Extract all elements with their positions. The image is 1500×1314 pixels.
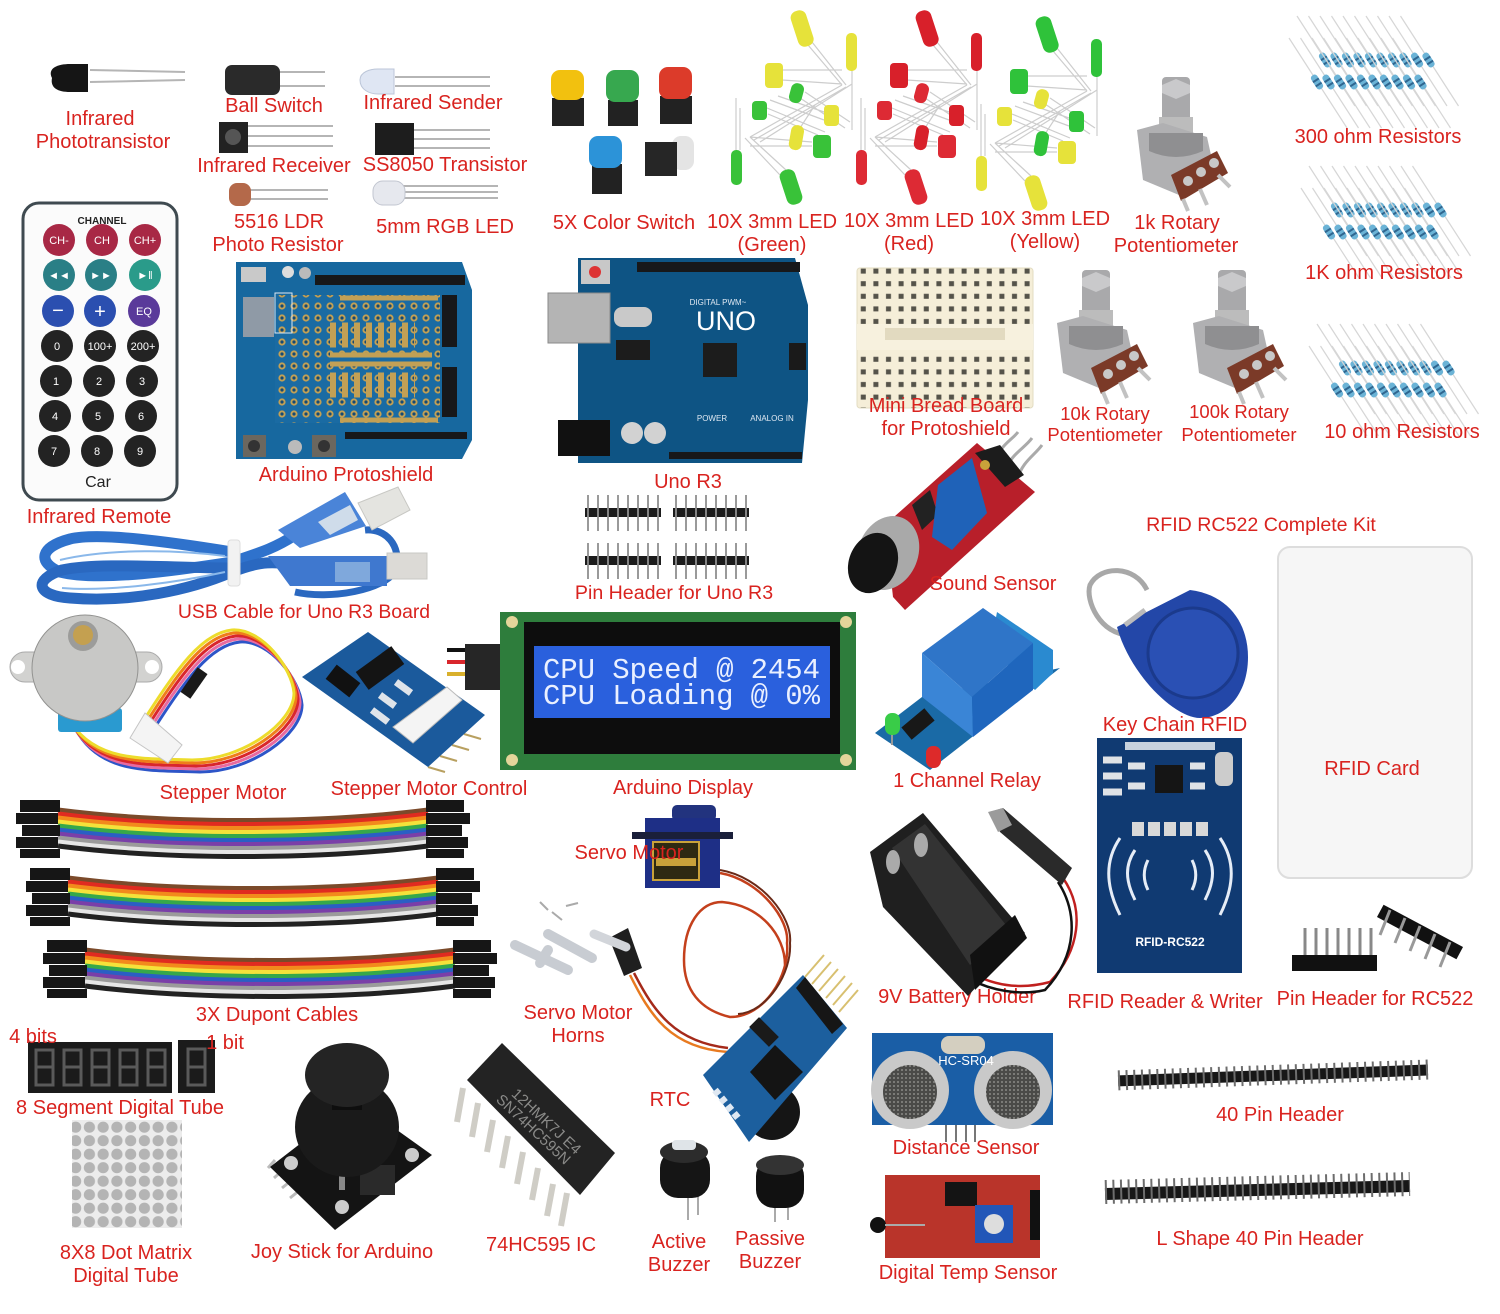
labels: bottom rows: Pin Header for RC522 xyxy=(1277,988,1473,1010)
icon: infrared sender xyxy=(360,69,490,94)
labels: bottom rows: Joy Stick for Arduino xyxy=(251,1241,433,1263)
resistors 1k ohm xyxy=(1301,166,1470,278)
icon: L shape 40 pin header xyxy=(1105,1180,1410,1200)
icon: servo motor with wires xyxy=(632,805,790,1017)
panel: RFID reader board: RFID-RC522 xyxy=(1135,935,1205,949)
labels: top row: 10X 3mm LED xyxy=(844,210,974,232)
panel: infrared remote: CHANNEL xyxy=(78,216,126,227)
panel: infrared remote: 3 xyxy=(139,376,145,388)
labels: bottom rows: RTC xyxy=(650,1089,690,1111)
panel: 4-digit segment display xyxy=(28,1042,172,1093)
panel: infrared remote: 7 xyxy=(51,446,57,458)
panel: HC-SR04 distance sensor xyxy=(871,1033,1053,1142)
labels: bottom rows: 8X8 Dot Matrix xyxy=(60,1242,192,1264)
icon: white push switch xyxy=(645,136,694,176)
panel: infrared remote: 9 xyxy=(137,446,143,458)
icon: 1k potentiometer xyxy=(1137,77,1230,211)
panel: arduino display lcd xyxy=(447,612,856,770)
panel: infrared remote: 8 xyxy=(94,446,100,458)
labels: middle row: Arduino Display xyxy=(613,777,753,799)
labels: top row: Infrared xyxy=(66,108,134,130)
resistors 10 ohm xyxy=(1309,324,1478,436)
labels: top row: 1K ohm Resistors xyxy=(1305,262,1463,284)
label: 9V battery holder: 9V Battery Holder xyxy=(878,986,1036,1008)
labels: top row: Infrared Sender xyxy=(364,92,503,114)
LED cluster green xyxy=(731,8,857,207)
icon: relay module xyxy=(875,608,1060,770)
panel: infrared remote: 200+ xyxy=(131,341,155,353)
icon: infrared phototransistor xyxy=(51,64,185,92)
labels: middle row: 10k Rotary xyxy=(1060,403,1150,424)
labels: bottom rows: 40 Pin Header xyxy=(1216,1104,1344,1126)
panel: infrared remote: ►‖ xyxy=(137,270,153,282)
panel: infrared remote: 4 xyxy=(52,411,58,423)
resistors 300 ohm xyxy=(1289,16,1458,128)
icon: 10k potentiometer xyxy=(1057,270,1150,404)
dupont cable 2 xyxy=(26,868,480,926)
icon: RC522 pin headers xyxy=(1292,905,1463,971)
labels: top row: 10X 3mm LED xyxy=(980,208,1110,230)
LED cluster red xyxy=(856,8,982,207)
icon: RFID card xyxy=(1278,547,1472,878)
panel: arduino protoshield xyxy=(236,262,472,459)
panel: infrared remote: 0 xyxy=(54,341,60,353)
icon: passive buzzer xyxy=(756,1155,804,1222)
labels: bottom rows: Active xyxy=(652,1231,706,1253)
panel: infrared remote: CH+ xyxy=(134,235,156,247)
icon: red push switch xyxy=(659,67,692,124)
labels: top row: 10X 3mm LED xyxy=(707,211,837,233)
panel: infrared remote: − xyxy=(52,300,64,322)
panel: 8x8 dot matrix xyxy=(72,1120,182,1228)
labels: middle row: Sound Sensor xyxy=(930,573,1057,595)
labels: top row xyxy=(36,92,1480,443)
labels: top row: Ball Switch xyxy=(225,95,323,117)
labels: bottom rows: 74HC595 IC xyxy=(486,1234,596,1256)
labels: bottom rows: L Shape 40 Pin Header xyxy=(1156,1228,1364,1250)
labels: bottom rows: 8 Segment Digital Tube xyxy=(16,1097,224,1119)
labels: bottom rows: RFID Reader & Writer xyxy=(1067,991,1263,1013)
labels: top row: 10 ohm Resistors xyxy=(1324,421,1480,443)
panel: infrared remote: 6 xyxy=(138,411,144,423)
panel: uno r3 board: POWER xyxy=(697,414,727,423)
labels: top row: Infrared Receiver xyxy=(197,155,351,177)
panel: uno r3 board xyxy=(548,258,808,463)
panel: infrared remote: 2 xyxy=(96,376,102,388)
icon: 74HC595 chip: SN74HC595N xyxy=(493,1091,574,1168)
labels: bottom rows: Buzzer xyxy=(648,1254,710,1276)
labels: middle row: Stepper Motor Control xyxy=(331,778,527,800)
icon: joystick xyxy=(268,1043,432,1230)
icon: sound sensor xyxy=(839,432,1042,610)
labels: top row: Phototransistor xyxy=(36,131,171,153)
icon: yellow push switch xyxy=(551,70,584,126)
labels: middle row: Stepper Motor xyxy=(160,782,287,804)
panel: infrared remote: ►► xyxy=(90,270,112,282)
labels: top row: 5X Color Switch xyxy=(553,212,695,234)
icon: servo motor horns xyxy=(515,902,728,1052)
labels: middle row: Infrared Remote xyxy=(27,506,171,528)
icon: RFID key chain xyxy=(1089,571,1248,718)
labels: middle row: RFID RC522 Complete Kit xyxy=(1146,514,1376,536)
labels: middle row: Mini Bread Board xyxy=(869,395,1023,417)
labels: bottom rows: Distance Sensor xyxy=(893,1137,1040,1159)
labels: bottom rows: Passive xyxy=(735,1228,805,1250)
panel: 1-digit segment display xyxy=(178,1040,215,1093)
icon: green push switch xyxy=(606,70,639,126)
panel: infrared remote xyxy=(23,203,177,500)
icon: 9V battery holder xyxy=(870,808,1077,996)
icon: 74HC595 chip xyxy=(457,1043,615,1226)
labels: top row: 1k Rotary xyxy=(1134,212,1220,234)
panel: uno r3 board: UNO xyxy=(696,306,756,336)
icon: RGB LED xyxy=(373,181,498,205)
labels: top row: 300 ohm Resistors xyxy=(1295,126,1461,148)
panel: infrared remote: ◄◄ xyxy=(48,270,70,282)
icon: stepper motor xyxy=(10,615,302,772)
labels: middle row: Pin Header for Uno R3 xyxy=(575,582,773,604)
labels: middle row: 1 Channel Relay xyxy=(893,770,1041,792)
labels: top row: (Green) xyxy=(738,234,806,256)
icon: LDR photo resistor xyxy=(229,183,328,206)
labels: top row: SS8050 Transistor xyxy=(363,154,528,176)
labels: middle row: Uno R3 xyxy=(654,471,722,493)
icon: RTC module xyxy=(703,955,858,1142)
labels: top row: 5mm RGB LED xyxy=(376,216,514,238)
icon: ball switch xyxy=(225,65,325,95)
labels: middle row: Potentiometer xyxy=(1047,424,1163,445)
icon: blue push switch xyxy=(589,136,622,194)
labels: bottom rows: 1 bit xyxy=(206,1032,244,1054)
icon: SS8050 transistor xyxy=(375,123,490,155)
dupont cable 1 xyxy=(16,800,470,858)
labels: bottom rows: 3X Dupont Cables xyxy=(196,1004,358,1026)
labels: bottom rows xyxy=(9,842,1473,1287)
panel: infrared remote: 100+ xyxy=(88,341,112,353)
labels: middle row xyxy=(27,395,1420,804)
panel: mini bread board xyxy=(857,268,1033,408)
panel: arduino display lcd: CPU Loading @ 0% xyxy=(543,680,821,713)
dupont cable 3 xyxy=(43,940,497,998)
labels: bottom rows: 4 bits xyxy=(9,1026,57,1048)
labels: top row: (Red) xyxy=(884,233,934,255)
labels: middle row: Potentiometer xyxy=(1181,424,1297,445)
panel: infrared remote: + xyxy=(94,301,106,323)
labels: bottom rows: Servo Motor xyxy=(575,842,684,864)
labels: middle row: 100k Rotary xyxy=(1189,401,1290,422)
panel: infrared remote: CH- xyxy=(49,235,69,247)
icon: usb cable xyxy=(42,487,427,599)
labels: top row: Potentiometer xyxy=(1114,235,1239,257)
labels: middle row: Key Chain RFID xyxy=(1103,714,1247,736)
panel: arduino display lcd: CPU Speed @ 2454 xyxy=(543,654,820,687)
labels: bottom rows: Digital Tube xyxy=(73,1265,179,1287)
labels: bottom rows: Digital Temp Sensor xyxy=(879,1262,1058,1284)
labels: middle row: for Protoshield xyxy=(882,418,1010,440)
labels: bottom rows: Servo Motor xyxy=(524,1002,633,1024)
LED cluster yellow xyxy=(976,14,1102,213)
icon: active buzzer xyxy=(660,1140,710,1220)
panel: infrared remote: 5 xyxy=(95,411,101,423)
icon: infrared receiver xyxy=(219,122,333,153)
labels: bottom rows: Horns xyxy=(551,1025,605,1047)
panel: HC-SR04 distance sensor: HC-SR04 xyxy=(938,1053,994,1068)
labels: top row: Photo Resistor xyxy=(212,234,344,256)
panel: infrared remote: EQ xyxy=(136,306,152,318)
panel: uno r3 board: ANALOG IN xyxy=(750,414,794,423)
labels: bottom rows: Buzzer xyxy=(739,1251,801,1273)
icon: 40 pin header xyxy=(1118,1065,1428,1086)
labels: top row: 5516 LDR xyxy=(234,211,324,233)
panel: infrared remote: Car xyxy=(85,474,112,491)
labels: middle row: USB Cable for Uno R3 Board xyxy=(178,601,430,623)
icon: 100k potentiometer xyxy=(1193,270,1286,404)
panel: infrared remote: 1 xyxy=(53,376,59,388)
labels: middle row: Arduino Protoshield xyxy=(259,464,433,486)
icon: stepper motor control board xyxy=(302,632,485,772)
labels: middle row: RFID Card xyxy=(1324,758,1420,780)
icon: 74HC595 chip: 12HMK7J E4 xyxy=(508,1085,584,1158)
labels: top row: (Yellow) xyxy=(1010,231,1080,253)
panel: uno r3 board: DIGITAL PWM~ xyxy=(690,298,747,307)
panel: infrared remote: CH xyxy=(94,235,110,247)
panel: RFID reader board xyxy=(1097,738,1242,973)
panel: digital temp sensor xyxy=(870,1175,1040,1258)
icon: pin header set xyxy=(585,495,749,579)
